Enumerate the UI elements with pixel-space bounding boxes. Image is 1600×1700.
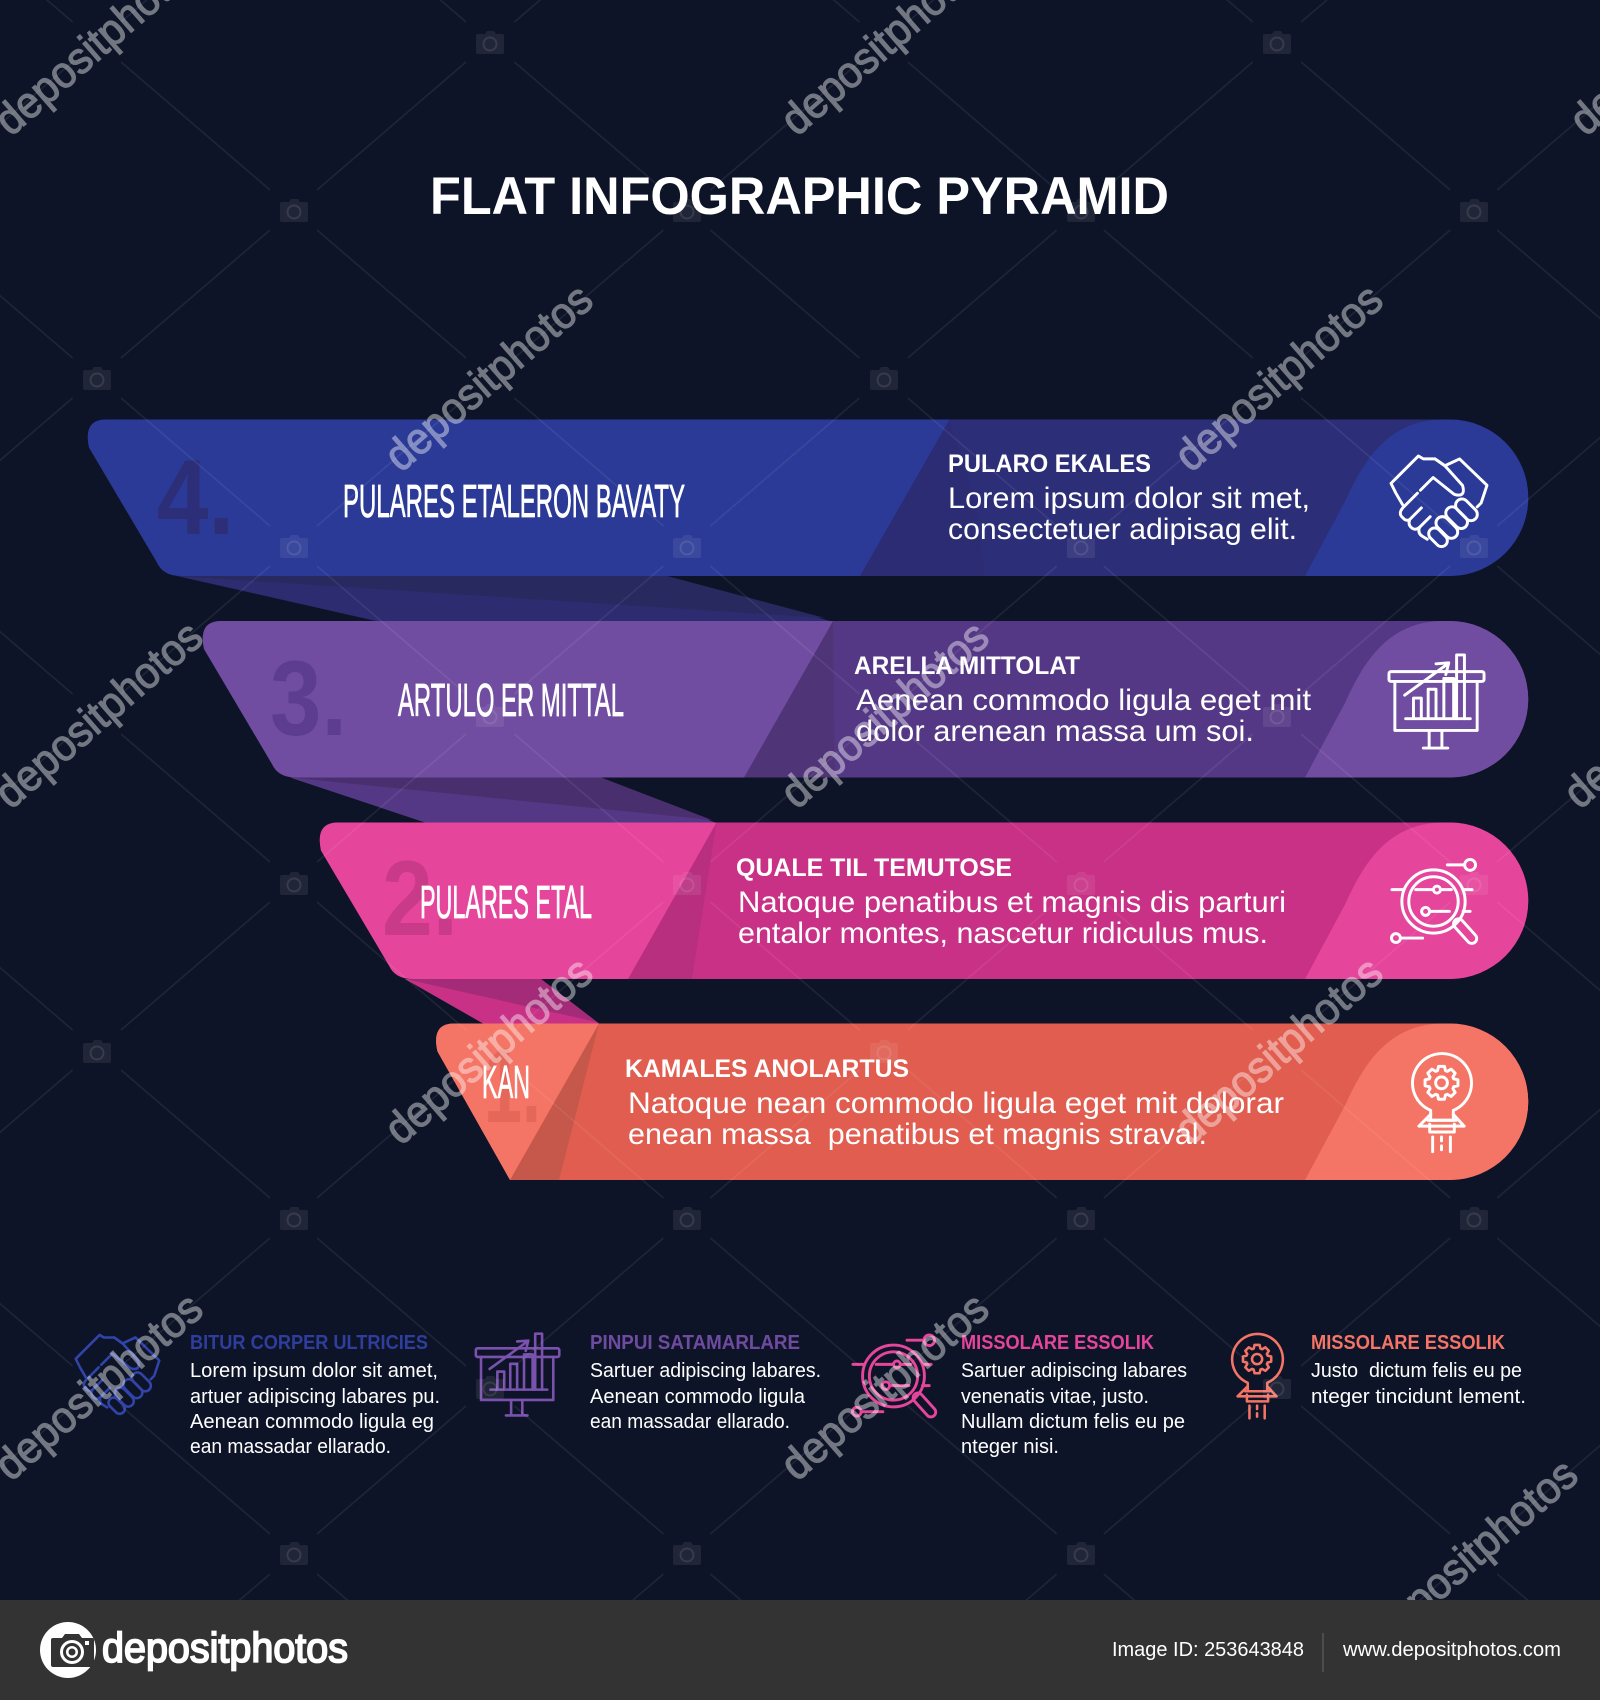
number 1: 1. (484, 1025, 541, 1145)
level 2 description: entalor montes, nascetur ridiculus mus. (738, 917, 1268, 950)
legend text block 2: Aenean commodo ligula (590, 1386, 806, 1408)
watermark wordmarks: depositphotos (771, 1284, 998, 1490)
legend text block 2: PINPUI SATAMARLARE (590, 1332, 800, 1354)
legend text block 4: Justo dictum felis eu pe (1311, 1360, 1522, 1382)
level 2 label: PULARES ETAL (420, 876, 592, 928)
watermark wordmarks: depositphotos (1165, 948, 1392, 1154)
level 4 description: PULARO EKALES (948, 450, 1151, 478)
icon: presentation chart (1389, 655, 1484, 748)
title: FLAT INFOGRAPHIC PYRAMID (430, 167, 1169, 226)
legend item: missolare essolik pink (852, 1332, 1187, 1458)
icon: handshake (1391, 456, 1487, 549)
legend text block 2: ean massadar ellarado. (590, 1411, 790, 1433)
watermark wordmarks: depositphotos (1165, 275, 1392, 481)
footer bar (0, 1600, 1600, 1700)
panel: level 3 band (203, 621, 1528, 778)
legend icon: handshake (76, 1335, 159, 1416)
legend text block 3: MISSOLARE ESSOLIK (961, 1332, 1155, 1354)
panel: level 2 band (320, 822, 1528, 979)
level 4 description: consectetuer adipisag elit. (948, 513, 1297, 546)
level 4 label: PULARES ETALERON BAVATY (343, 475, 685, 527)
legend text block 4: MISSOLARE ESSOLIK (1311, 1332, 1506, 1354)
level 3 description (854, 652, 1312, 748)
legend item: bitur corper ultricies (76, 1332, 440, 1458)
legend text block 1: BITUR CORPER ULTRICIES (190, 1332, 428, 1354)
image id: Image ID: 253643848 (1112, 1639, 1304, 1661)
fold connectors between bands (177, 576, 830, 1024)
legend text block 3 (961, 1332, 1187, 1458)
legend text block 2: Sartuer adipiscing labares. (590, 1360, 821, 1382)
level 3 description: Aenean commodo ligula eget mit (856, 684, 1312, 717)
watermark wordmarks: depositphotos (771, 612, 998, 818)
panel: level 1 band (436, 1024, 1528, 1180)
level 4 description: Lorem ipsum dolor sit met, (948, 482, 1310, 515)
level 2 description (736, 854, 1286, 950)
legend text block 3: venenatis vitae, justo. (961, 1386, 1149, 1408)
legend text block 4: nteger tincidunt lement. (1311, 1386, 1526, 1408)
level 3 label: ARTULO ER MITTAL (398, 674, 624, 726)
level 1 description (625, 1055, 1284, 1151)
legend text block 1: artuer adipiscing labares pu. (190, 1386, 440, 1408)
footer logo icon (40, 1622, 96, 1678)
level 1 description: KAMALES ANOLARTUS (625, 1055, 909, 1083)
level 1 description: enean massa penatibus et magnis straval. (628, 1118, 1207, 1151)
icon: magnifier (1391, 859, 1479, 945)
watermark wordmarks: depositphotos (375, 948, 602, 1154)
website url: www.depositphotos.com (1342, 1639, 1561, 1661)
legend icon: magnifier (852, 1335, 938, 1419)
watermark wordmarks: depositphotos (375, 275, 602, 481)
legend text block 3: Sartuer adipiscing labares (961, 1360, 1187, 1382)
legend icon: presentation chart (476, 1334, 559, 1415)
legend text block 1: ean massadar ellarado. (190, 1436, 391, 1458)
legend text block 3: nteger nisi. (961, 1436, 1059, 1458)
legend text block 2 (590, 1332, 821, 1433)
level 2 description: Natoque penatibus et magnis dis parturi (738, 886, 1286, 919)
number 3: 3. (270, 638, 347, 758)
level 3 description: ARELLA MITTOLAT (854, 652, 1080, 680)
legend text block 1 (190, 1332, 440, 1458)
legend text block 1: Aenean commodo ligula eg (190, 1411, 434, 1433)
legend text block 4 (1311, 1332, 1526, 1408)
number 4: 4. (157, 437, 234, 557)
legend item: pinpui satamarlare (476, 1332, 821, 1433)
panel: level 4 band (88, 420, 1528, 576)
legend text block 3: Nullam dictum felis eu pe (961, 1411, 1185, 1433)
level 4 description (948, 450, 1310, 546)
icon: light bulb gear (1412, 1054, 1472, 1152)
legend text block 1: Lorem ipsum dolor sit amet, (190, 1360, 438, 1382)
number 2: 2. (382, 838, 458, 958)
level 1 label: KAN (482, 1056, 530, 1108)
legend item: missolare essolik coral (1232, 1332, 1526, 1418)
level 1 description: Natoque nean commodo ligula eget mit dolorar (628, 1087, 1284, 1120)
watermark wordmarks: depositphotos (1360, 1450, 1587, 1656)
legend icon: light bulb gear (1232, 1334, 1283, 1418)
level 3 description: dolor arenean massa um soi. (856, 715, 1254, 748)
level 2 description: QUALE TIL TEMUTOSE (736, 854, 1012, 882)
footer logo wordmark: depositphotos (102, 1624, 348, 1671)
